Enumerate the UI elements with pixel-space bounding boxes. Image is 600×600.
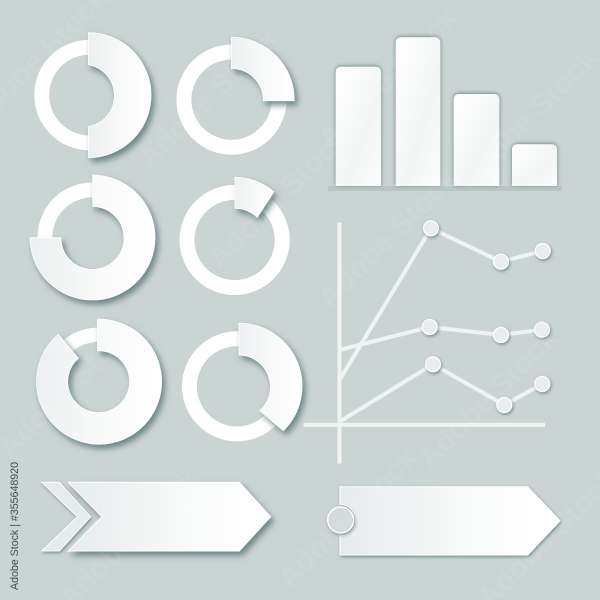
- donut 5 raised segment: [37, 319, 162, 444]
- donut 6 raised segment: [239, 323, 302, 431]
- watermarks: Adobe Stock: [132, 22, 285, 175]
- tag body: [340, 487, 560, 555]
- bar chart baseline: [328, 186, 562, 191]
- bar 2: [396, 37, 440, 186]
- donut 5 ring: [51, 335, 145, 429]
- tag arrow banner: [328, 487, 560, 555]
- bar 3: [454, 94, 499, 186]
- line chart: [304, 221, 550, 464]
- line series 1: [340, 221, 550, 380]
- bar chart: [328, 37, 562, 191]
- donut 2 ring: [184, 52, 279, 147]
- donut chart 1: [42, 33, 151, 158]
- tag circle: [328, 507, 354, 533]
- line series 2: [340, 320, 550, 350]
- donut chart 6: [189, 323, 302, 434]
- horizontal axis: [304, 423, 545, 427]
- donut 6 ring: [189, 339, 285, 434]
- side credit text: Adobe Stock | #355648920: [9, 462, 21, 590]
- watermarks: Adobe Stock: [312, 162, 465, 315]
- bar 4: [512, 144, 557, 186]
- series 2 point markers: [422, 320, 550, 342]
- donut chart 5: [37, 319, 162, 444]
- donut chart 2: [184, 37, 294, 147]
- main arrow body: [68, 482, 271, 551]
- small chevron: [42, 482, 91, 551]
- vertical axis: [338, 222, 342, 464]
- donut 2 raised segment: [232, 37, 294, 101]
- donut 3 raised segment: [30, 175, 155, 300]
- bar 1: [336, 67, 381, 186]
- donut chart 4: [187, 177, 282, 288]
- series 3 point markers: [426, 357, 550, 412]
- donut 3 ring: [45, 190, 140, 285]
- donut 1 ring: [42, 47, 137, 143]
- watermarks: Adobe Stock: [202, 122, 355, 275]
- watermarks: Adobe Stock: [412, 322, 565, 475]
- donut 4 ring: [187, 192, 282, 288]
- donut 4 raised segment: [235, 177, 274, 217]
- donut 1 raised segment: [88, 33, 151, 158]
- donut chart 3: [30, 175, 155, 300]
- watermarks: Adobe Stock: [272, 442, 425, 595]
- line series 3: [340, 357, 550, 422]
- chevron arrow banner: [42, 482, 271, 551]
- watermarks: Adobe Stock: [312, 2, 465, 155]
- series 1 point markers: [424, 221, 550, 269]
